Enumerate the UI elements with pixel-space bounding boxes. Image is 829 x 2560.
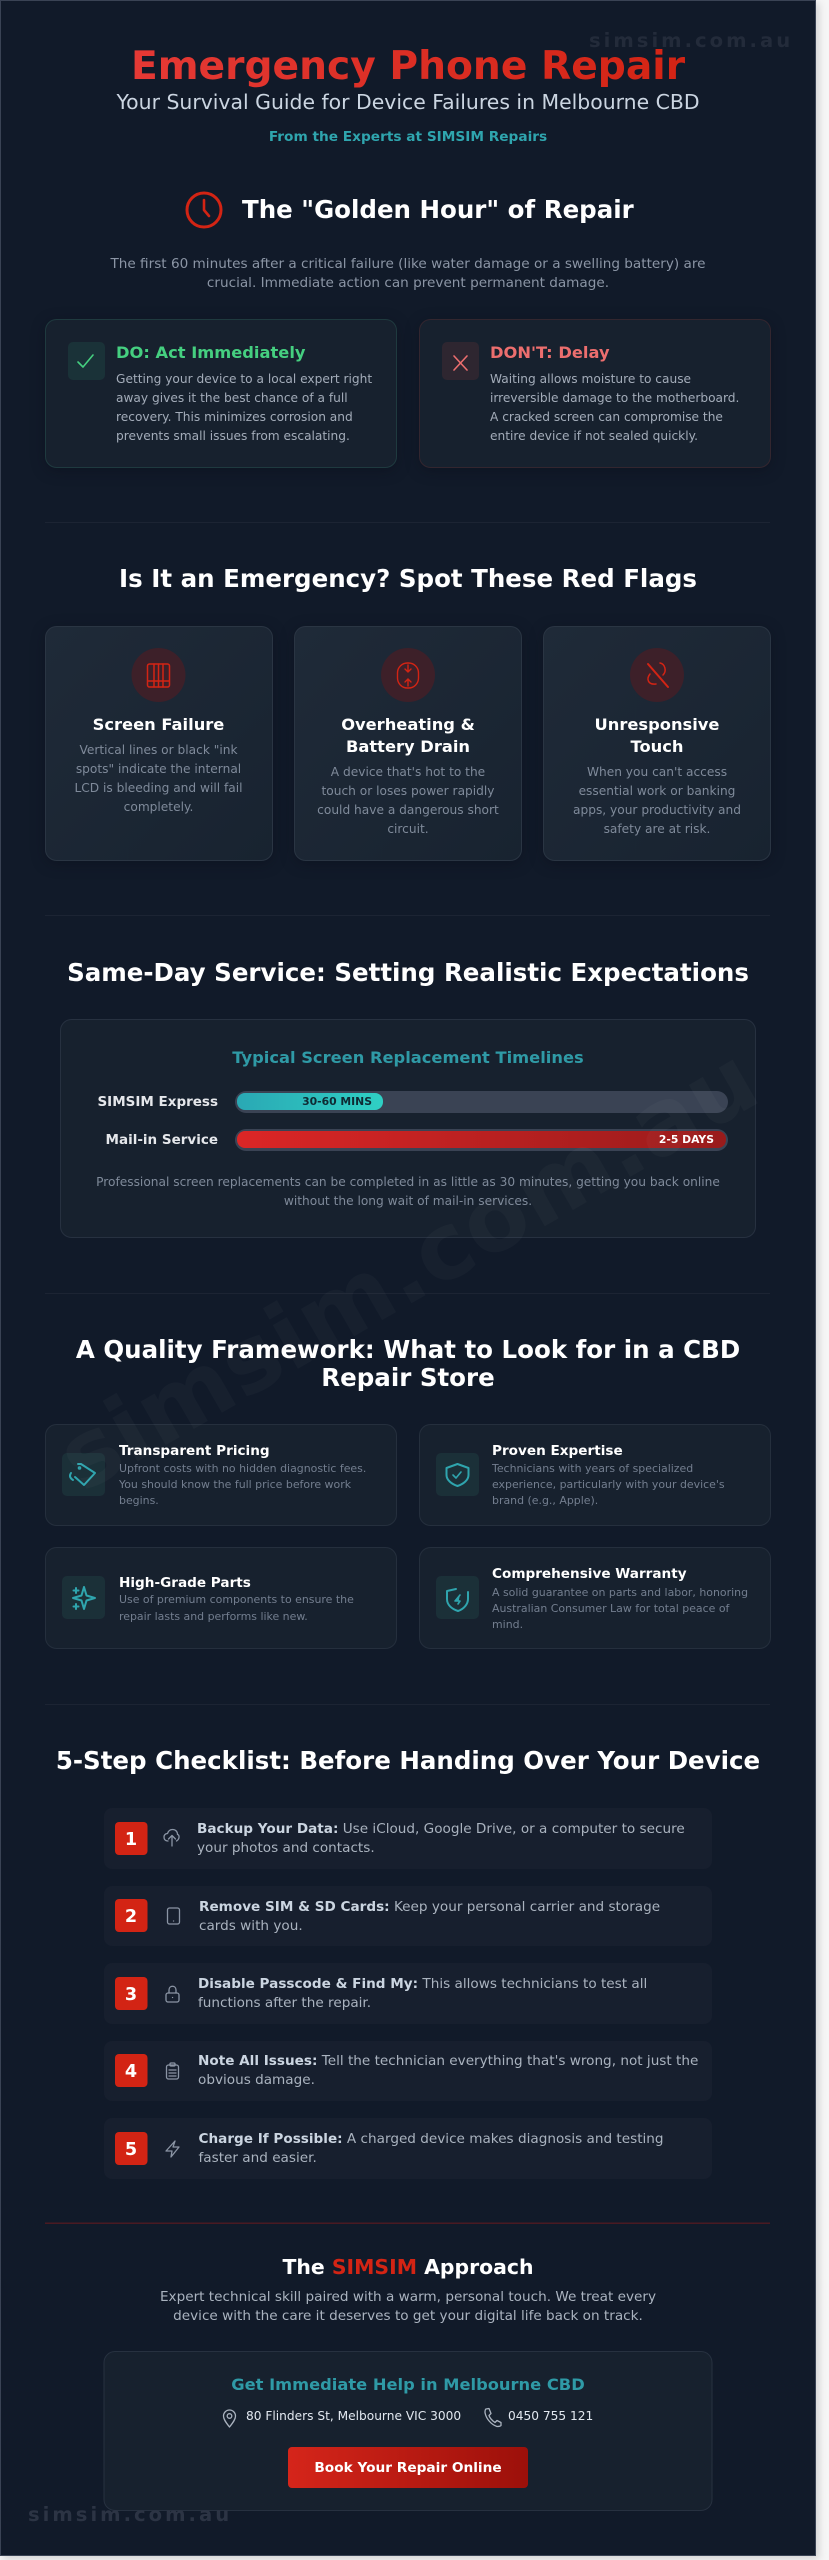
section: golden hour — [109, 193, 706, 291]
icon: touch off — [630, 648, 684, 702]
icon: shield — [436, 1576, 479, 1619]
pricing title: Transparent Pricing — [119, 1443, 270, 1459]
approach text — [160, 2289, 656, 2324]
phone — [485, 2408, 593, 2426]
overheating text: circuit. — [387, 822, 429, 836]
badge 5: 5 — [125, 2140, 137, 2160]
icon: sparkles — [62, 1576, 105, 1619]
expertise text: Technicians with years of specialized — [491, 1462, 693, 1475]
address: 80 Flinders St, Melbourne VIC 3000 — [246, 2409, 461, 2423]
icon: clipboard — [166, 2063, 178, 2079]
card: do — [46, 320, 396, 468]
dont body: Waiting allows moisture to cause — [490, 372, 691, 386]
bar: simsim express: SIMSIM Express — [97, 1094, 218, 1110]
bar: simsim express: 30-60 MINS — [302, 1095, 372, 1108]
overheating text — [317, 765, 499, 836]
icon: clock — [187, 193, 221, 227]
warranty text: mind. — [492, 1618, 523, 1631]
header: title block — [115, 44, 700, 145]
badge 3 — [115, 1977, 148, 2010]
dont body: entire device if not sealed quickly. — [490, 429, 698, 443]
icon: cross — [442, 342, 479, 380]
heading: golden hour: The "Golden Hour" of Repair — [242, 195, 635, 224]
bar: mail-in: Mail-in Service — [106, 1132, 218, 1148]
card: dont — [420, 320, 770, 468]
expertise text: experience, particularly with your device's — [492, 1478, 725, 1491]
overheating title — [341, 715, 475, 756]
step 3 — [104, 1963, 712, 2024]
screen text: spots" indicate the internal — [76, 762, 241, 776]
step 4 text: Note All Issues: Tell the technician everything that's wrong, not just the — [198, 2053, 698, 2069]
step 4 text — [198, 2053, 698, 2088]
heading: checklist: 5-Step Checklist: Before Handing Over Your Device — [56, 1746, 760, 1775]
approach block — [160, 2255, 656, 2324]
badge 2 — [115, 1899, 148, 1932]
unresponsive text: When you can't access — [587, 765, 727, 779]
bar: simsim express — [97, 1091, 728, 1113]
badge 3: 3 — [125, 1985, 137, 2005]
unresponsive text — [573, 765, 741, 836]
warranty text — [492, 1586, 748, 1631]
icon: phone — [168, 1908, 180, 1924]
overheating title: Battery Drain — [346, 737, 470, 756]
step 3 text: functions after the repair. — [198, 1995, 371, 2011]
heading: same-day: Same-Day Service: Setting Realistic Expectations — [67, 958, 749, 987]
subtitle: Your Survival Guide for Device Failures in Melbourne CBD — [115, 90, 700, 114]
step 5 — [104, 2118, 712, 2179]
expertise text — [491, 1462, 725, 1507]
icon: cloud upload — [164, 1830, 179, 1846]
phone: 0450 755 121 — [508, 2409, 593, 2423]
step 3 text: Disable Passcode & Find My: This allows technicians to test all — [198, 1976, 647, 1992]
screen text: Vertical lines or black "ink — [79, 743, 238, 757]
dont body — [490, 372, 739, 443]
title: Emergency Phone Repair — [131, 44, 686, 89]
screen text: LCD is bleeding and will fail — [74, 781, 243, 795]
heading: quality framework — [76, 1335, 740, 1392]
button: Book Your Repair Online — [314, 2460, 502, 2476]
step 3 text — [198, 1976, 647, 2011]
warranty text: Australian Consumer Law for total peace of — [492, 1602, 731, 1615]
step 5 text — [198, 2131, 664, 2166]
do title: DO: Act Immediately — [116, 343, 306, 362]
watermark: diagonal: simsim.com.au — [40, 1025, 776, 1512]
unresponsive text: safety are at risk. — [604, 822, 710, 836]
pricing text: Upfront costs with no hidden diagnostic fees. — [119, 1462, 366, 1475]
step 1 text: your photos and contacts. — [197, 1840, 375, 1856]
warranty text: A solid guarantee on parts and labor, honoring — [492, 1586, 748, 1599]
step 5 text: Charge If Possible: A charged device makes diagnosis and testing — [198, 2131, 664, 2147]
parts text: Use of premium components to ensure the — [119, 1593, 354, 1606]
card: unresponsive touch — [544, 626, 770, 860]
do body: Getting your device to a local expert right — [116, 372, 372, 386]
overheating text: touch or loses power rapidly — [322, 784, 494, 798]
badge 5 — [115, 2132, 148, 2165]
icon: check — [68, 342, 105, 380]
badge 1 — [115, 1822, 148, 1855]
intro text — [109, 256, 706, 291]
step 1 text — [197, 1821, 685, 1856]
dont body: A cracked screen can compromise the — [490, 410, 723, 424]
unresponsive title: Unresponsive — [595, 715, 719, 734]
step 2 text: Remove SIM & SD Cards: Keep your personal carrier and storage — [199, 1899, 660, 1915]
chart caption: Professional screen replacements can be completed in as little as 30 minutes, getting you back online — [96, 1175, 720, 1189]
step 4 text: obvious damage. — [198, 2072, 315, 2088]
unresponsive title — [595, 715, 719, 756]
warranty title: Comprehensive Warranty — [492, 1566, 687, 1582]
step 4 — [104, 2041, 712, 2101]
card: high-grade parts — [46, 1548, 396, 1648]
contact heading: Get Immediate Help in Melbourne CBD — [231, 2375, 585, 2394]
heading: quality framework: A Quality Framework: What to Look for in a CBD — [76, 1335, 740, 1364]
panel: contact — [104, 2352, 712, 2510]
step 1 — [104, 1808, 712, 1869]
do body: prevents small issues from escalating. — [116, 429, 350, 443]
icon: shield check — [436, 1453, 479, 1496]
dont title: DON'T: Delay — [490, 343, 610, 362]
step 2 text — [199, 1899, 660, 1934]
expertise title: Proven Expertise — [492, 1443, 623, 1459]
badge 4: 4 — [125, 2062, 137, 2082]
overheating text: A device that's hot to the — [331, 765, 485, 779]
parts text — [119, 1593, 354, 1623]
pricing text: You should know the full price before work — [118, 1478, 352, 1491]
badge 2: 2 — [125, 1907, 137, 1927]
card: proven expertise — [420, 1424, 770, 1526]
chart caption: without the long wait of mail-in services. — [284, 1194, 532, 1208]
button — [288, 2447, 528, 2488]
icon: tag — [62, 1453, 105, 1496]
do body: recovery. This minimizes corrosion and — [116, 410, 353, 424]
unresponsive text: apps, your productivity and — [573, 803, 741, 817]
approach heading: The SIMSIM Approach — [282, 2255, 534, 2279]
parts title: High-Grade Parts — [119, 1575, 251, 1591]
parts text: repair lasts and performs like new. — [119, 1610, 308, 1623]
chart title: Typical Screen Replacement Timelines — [232, 1048, 584, 1067]
bar: mail-in — [106, 1129, 728, 1151]
chart caption — [96, 1175, 720, 1208]
icon: battery swelling — [381, 648, 435, 702]
do body — [116, 372, 372, 443]
unresponsive title: Touch — [631, 737, 683, 756]
overheating title: Overheating & — [341, 715, 475, 734]
heading: quality framework: Repair Store — [321, 1363, 495, 1392]
overheating text: could have a dangerous short — [317, 803, 499, 817]
icon: bolt — [166, 2141, 179, 2157]
screen text: completely. — [124, 800, 193, 814]
unresponsive text: essential work or banking — [579, 784, 735, 798]
heading: red flags: Is It an Emergency? Spot These Red Flags — [119, 564, 697, 593]
intro text: crucial. Immediate action can prevent permanent damage. — [207, 275, 609, 291]
screen title: Screen Failure — [93, 715, 224, 734]
intro text: The first 60 minutes after a critical failure (like water damage or a swelling battery) are — [109, 256, 706, 272]
step 1 text: Backup Your Data: Use iCloud, Google Drive, or a computer to secure — [197, 1821, 685, 1837]
bar: mail-in: 2-5 DAYS — [659, 1133, 714, 1146]
badge 4 — [115, 2054, 148, 2087]
step 2 text: cards with you. — [199, 1918, 303, 1934]
step 5 text: faster and easier. — [198, 2150, 317, 2166]
card: warranty — [420, 1548, 770, 1648]
screen text — [74, 743, 243, 814]
approach text: device with the care it deserves to get your digital life back on track. — [173, 2308, 643, 2324]
panel: timelines — [60, 1020, 756, 1238]
expertise text: brand (e.g., Apple). — [492, 1494, 598, 1507]
pricing text: begins. — [119, 1494, 159, 1507]
card: screen failure — [46, 626, 272, 860]
badge 1: 1 — [125, 1830, 137, 1850]
icon: lock — [166, 1986, 179, 2002]
step 2 — [104, 1886, 712, 1946]
card: transparent pricing — [46, 1424, 396, 1526]
icon: screen lines — [132, 648, 186, 702]
pricing text — [118, 1462, 366, 1507]
approach text: Expert technical skill paired with a warm, personal touch. We treat every — [160, 2289, 656, 2305]
watermark: bottom left: simsim.com.au — [28, 2503, 232, 2526]
byline: From the Experts at SIMSIM Repairs — [269, 129, 547, 145]
dont body: irreversible damage to the motherboard. — [490, 391, 739, 405]
do body: away gives it the best chance of a full — [116, 391, 348, 405]
card: overheating — [294, 626, 522, 860]
watermark: top right: simsim.com.au — [589, 29, 793, 52]
